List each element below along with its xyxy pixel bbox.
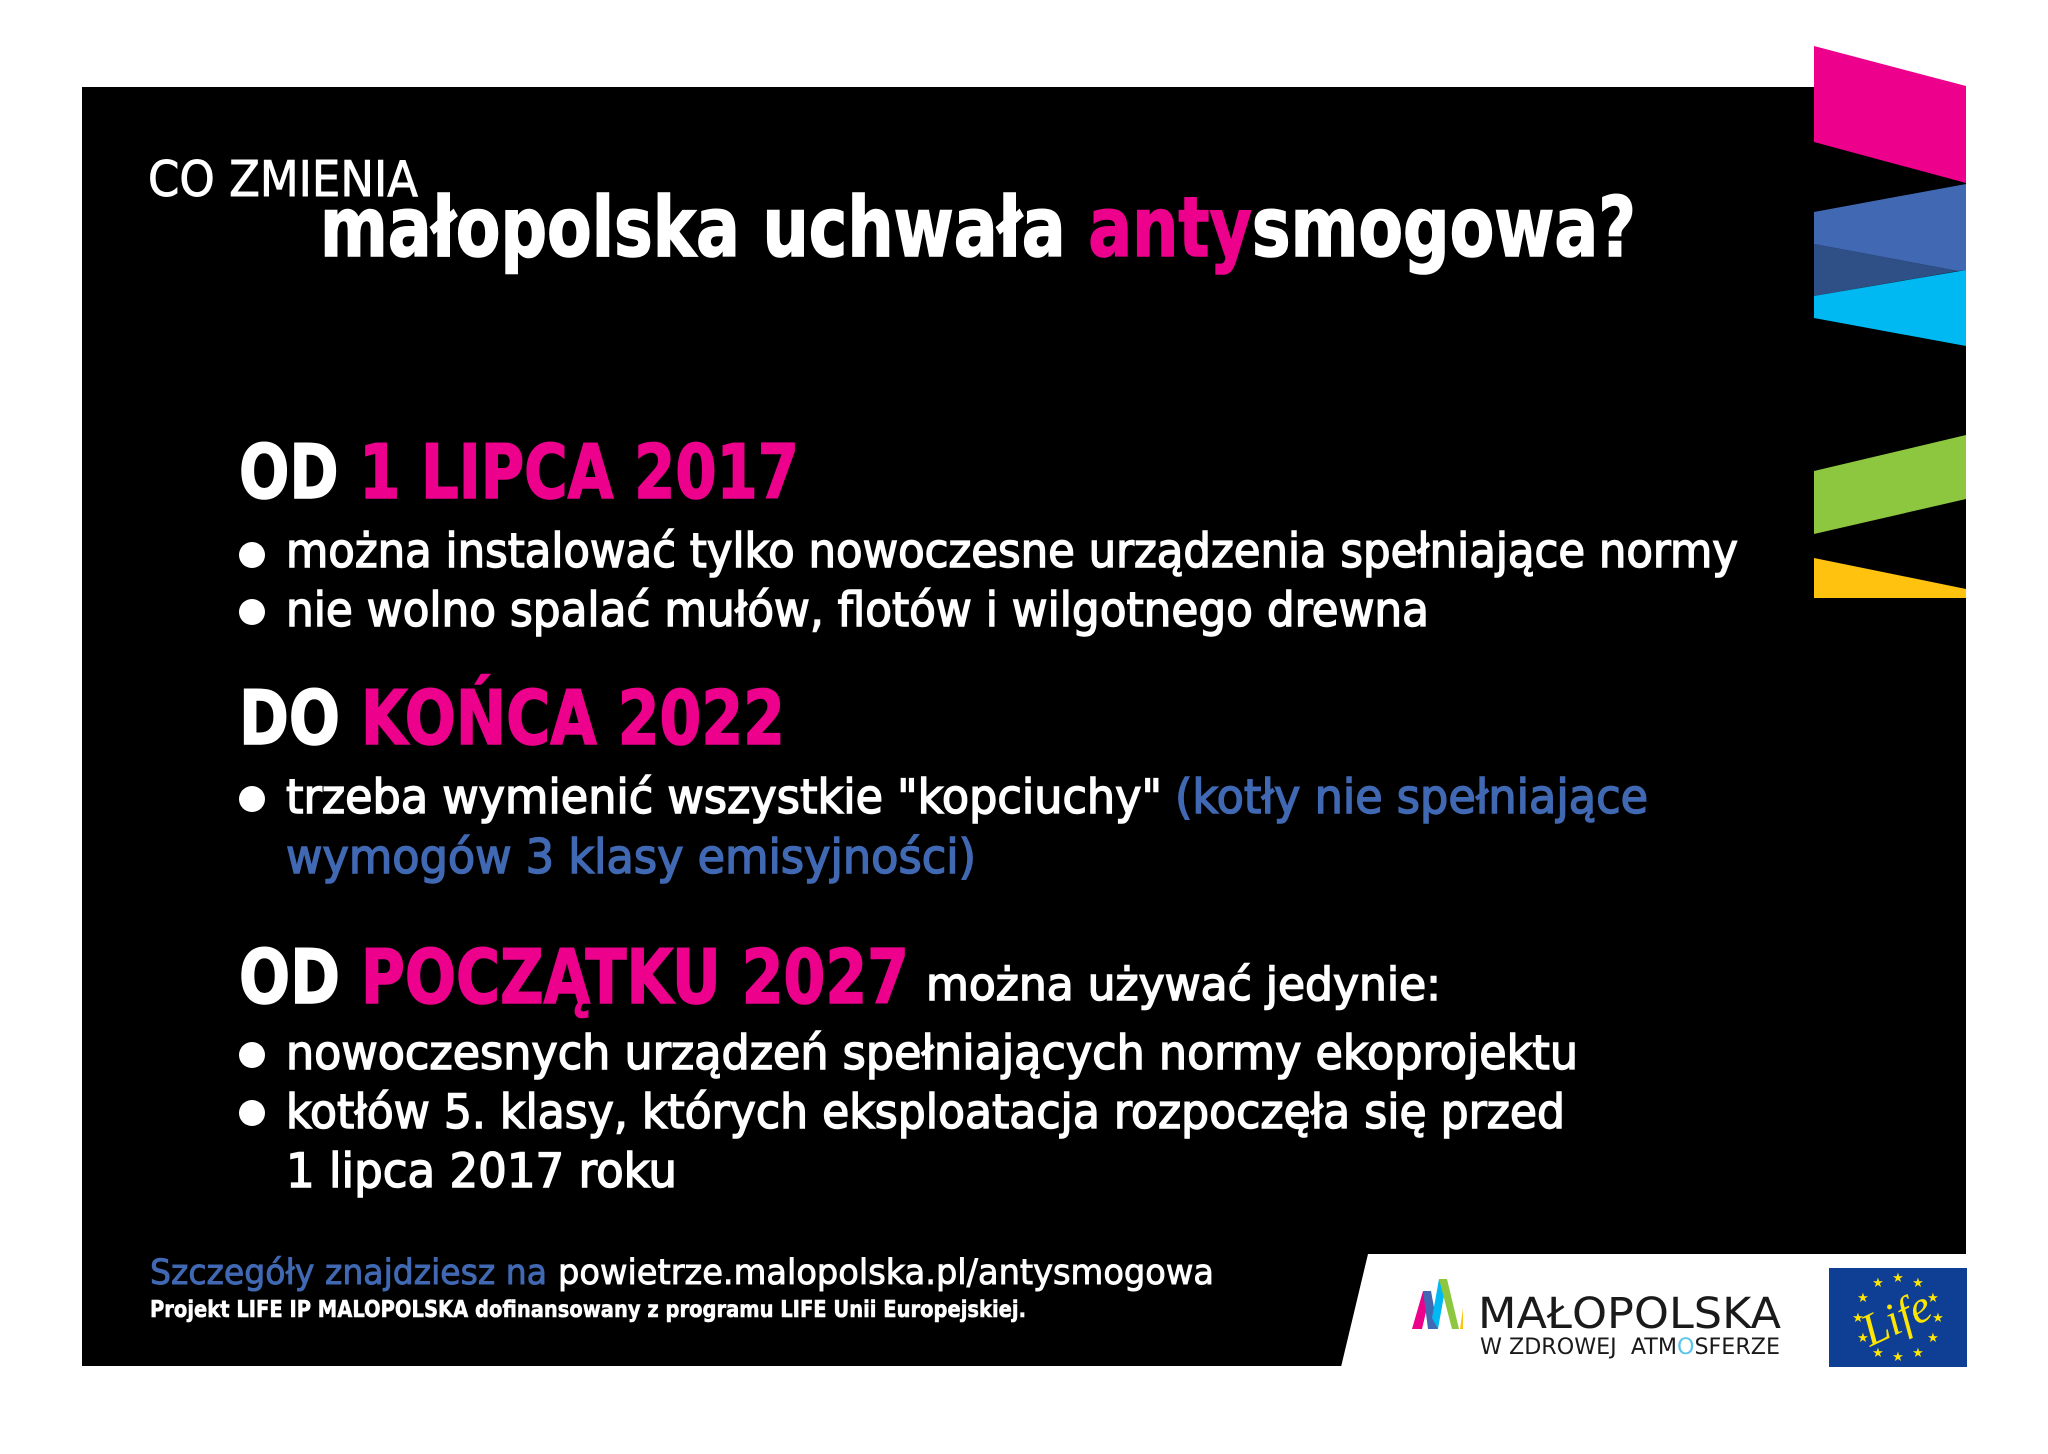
footer link line: Szczegóły znajdziesz na [150,1253,547,1293]
bullet text line 2: 1 lipca 2017 roku [286,1144,677,1199]
section: from start of 2027 [239,933,1578,1199]
flag stars: ★ [1912,1346,1924,1361]
blue explanation line 2: wymogów 3 klasy emisyjności) [286,830,976,885]
bullet text: nowoczesnych urządzeń spełniających normy ekoprojektu [286,1026,1578,1081]
section heading 2027: OD POCZĄTKU 2027 [239,933,909,1021]
decorative colour ribbons [1814,46,1966,598]
flag stars: ★ [1857,1331,1869,1346]
flag stars: ★ [1872,1346,1884,1361]
logo wordmark: MAŁOPOLSKA [1478,1289,1782,1339]
flag stars: ★ [1892,1350,1904,1365]
flag stars: ★ [1927,1331,1939,1346]
Małopolska logo [1412,1279,1782,1360]
bullet text: nie wolno spalać mułów, flotów i wilgotnego drewna [286,583,1429,638]
footer link line: powietrze.malopolska.pl/antysmogowa [558,1253,1214,1293]
flag stars: ★ [1927,1291,1939,1306]
flag stars: ★ [1912,1276,1924,1291]
flag stars: ★ [1852,1311,1864,1326]
flag stars: ★ [1892,1271,1904,1286]
icon: coloured M [1412,1279,1463,1329]
flag stars: ★ [1872,1276,1884,1291]
EU LIFE flag [1829,1268,1967,1367]
section heading 2022: DO KOŃCA 2022 [239,674,785,762]
bullet text: można instalować tylko nowoczesne urządzenia spełniające normy [286,524,1738,579]
main title: małopolska uchwała antysmogowa? [320,179,1636,276]
logo tagline: W ZDROWEJ ATMOSFERZE [1480,1335,1780,1360]
flag stars [1852,1271,1944,1365]
bullet [239,599,265,625]
title kicker: CO ZMIENIA [148,151,418,208]
heading suffix: można używać jedynie: [926,958,1441,1011]
section: from 1 July 2017 [239,428,1738,638]
bullet [239,786,265,812]
Life script: Life [1852,1280,1939,1356]
blue explanation line 1: (kotły nie spełniające [1175,770,1648,825]
bullet [239,1042,265,1068]
white logo panel [1341,1254,1966,1367]
footer project note: Projekt LIFE IP MALOPOLSKA dofinansowany z programu LIFE Unii Europejskiej. [150,1297,1026,1323]
section heading 2017: OD 1 LIPCA 2017 [239,428,799,516]
bullet [239,1100,265,1126]
bullet [239,542,265,568]
bullet text: trzeba wymienić wszystkie "kopciuchy" [286,770,1162,825]
section: by end of 2022 [239,674,1648,885]
footer link line [150,1253,1214,1293]
flag stars: ★ [1857,1291,1869,1306]
bullet text line 1: kotłów 5. klasy, których eksploatacja rozpoczęła się przed [286,1085,1565,1140]
flag stars: ★ [1932,1311,1944,1326]
